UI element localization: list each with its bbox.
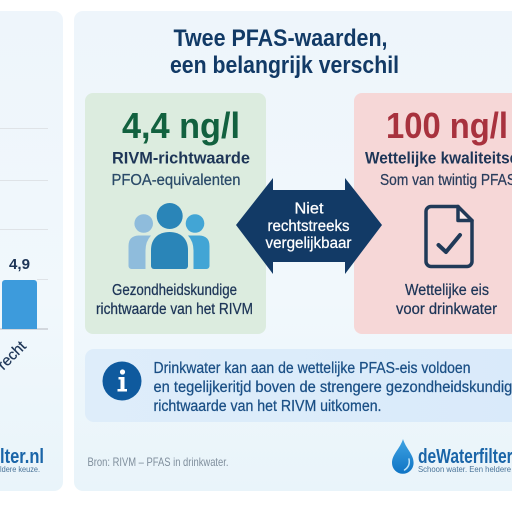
callout text: Drinkwater kan aan de wettelijke PFAS-eis voldoen bbox=[154, 360, 470, 377]
arrow: not directly comparable: vergelijkbaar bbox=[266, 235, 352, 252]
icon: info bbox=[102, 362, 142, 400]
logo fragment: lter.nl bbox=[0, 446, 44, 468]
card subheading: PFOA-equivalenten bbox=[112, 172, 240, 189]
icon: water drop bbox=[392, 439, 414, 474]
callout: info box bbox=[85, 349, 512, 422]
arrow: not directly comparable: rechtstreeks bbox=[268, 218, 350, 235]
tagline fragment: ldere keuze. bbox=[0, 464, 40, 474]
arrow: not directly comparable: Niet bbox=[294, 200, 324, 218]
arrow: not directly comparable bbox=[236, 178, 382, 274]
card description: Gezondheidskundige bbox=[112, 282, 237, 299]
card description: Wettelijke eis bbox=[405, 282, 489, 299]
bar value: 4,9 bbox=[9, 256, 30, 273]
card: RIVM guideline bbox=[85, 93, 266, 334]
title: een belangrijk verschil bbox=[170, 52, 399, 79]
title: Twee PFAS-waarden, bbox=[174, 25, 388, 52]
panel: comparison bbox=[74, 11, 512, 491]
card description bbox=[96, 282, 253, 318]
card heading: RIVM-richtwaarde bbox=[112, 148, 250, 168]
title bbox=[170, 25, 399, 79]
callout text bbox=[154, 360, 512, 415]
callout text: richtwaarde van het RIVM uitkomen. bbox=[154, 398, 382, 415]
value: 4,4 ng/l: 4,4 ng/l bbox=[122, 105, 240, 146]
logo: deWaterfilter bbox=[392, 439, 512, 474]
card description: richtwaarde van het RIVM bbox=[96, 301, 253, 318]
card description: voor drinkwater bbox=[396, 301, 497, 318]
icon: people bbox=[128, 203, 210, 269]
icon: document with check bbox=[426, 206, 472, 266]
card: legal limit bbox=[354, 93, 512, 334]
source note: Bron: RIVM – PFAS in drinkwater. bbox=[88, 455, 228, 469]
panel: left chart bbox=[0, 11, 63, 491]
bar: value 4,9 bbox=[2, 280, 37, 329]
card description bbox=[396, 282, 497, 318]
